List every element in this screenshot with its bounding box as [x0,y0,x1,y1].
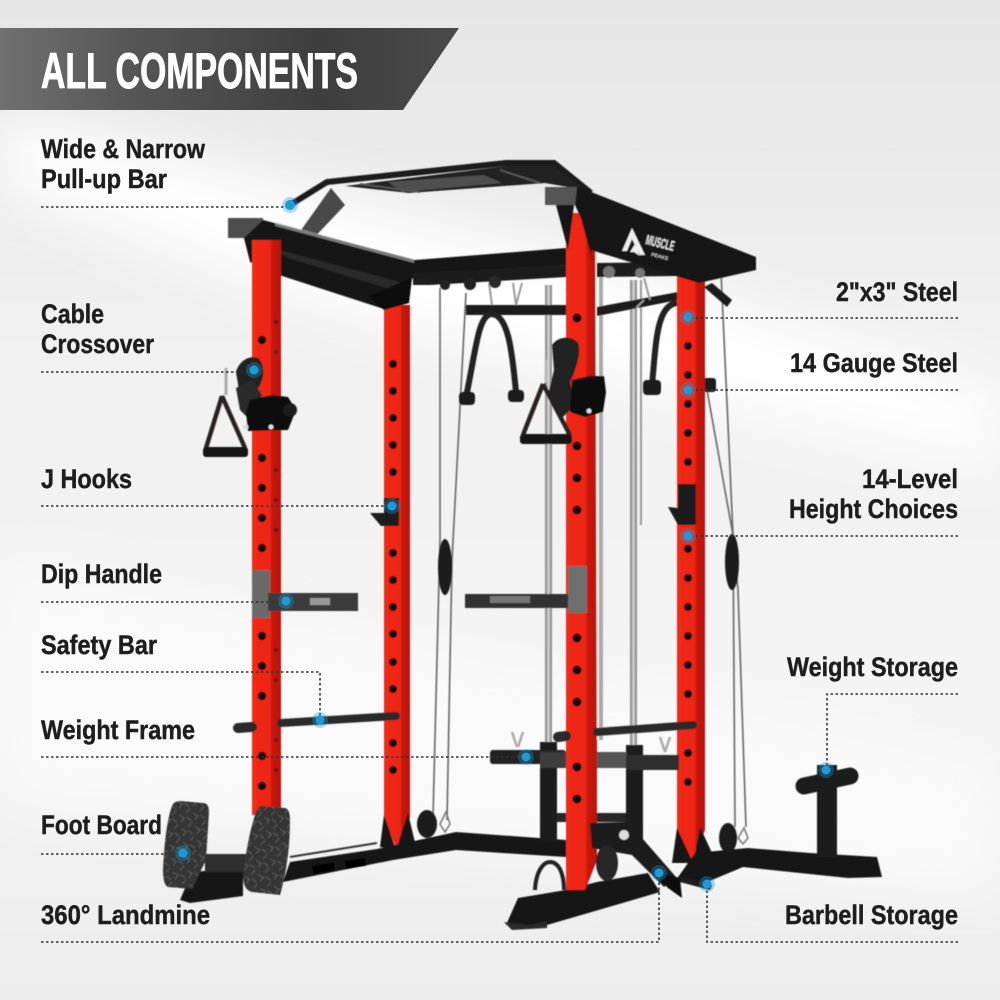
label: 14-level height choices [688,464,958,536]
label: wide and narrow pull-up bar: Pull-up Bar [41,164,167,194]
J hooks [370,484,696,526]
cable clips [438,534,739,595]
left pulley block and triangle handle [203,357,297,457]
top back beam [399,248,677,290]
left callouts [41,134,659,942]
landmine [590,822,712,898]
top plate with logo [545,187,756,307]
label: weight storage [787,652,958,770]
label: cable crossover [41,299,254,372]
label: cable crossover: Crossover [41,329,154,359]
left top beam [228,218,415,310]
label: weight frame: Weight Frame [41,715,195,745]
label: barbell storage: Barbell Storage [785,900,958,930]
label: dip handle: Dip Handle [41,559,162,589]
rear post gussets [380,813,712,865]
label: cable crossover: Cable [41,299,104,329]
label: wide and narrow pull-up bar: Wide & Narrow [41,134,206,164]
label: J hooks: J Hooks [41,464,132,494]
label: 360 degree landmine: 360° Landmine [41,900,210,930]
lower pulleys [417,810,748,853]
title: ALL COMPONENTS [41,43,358,99]
label: 14 gauge steel: 14 Gauge Steel [790,348,958,378]
logo: PEAKS [651,252,669,262]
blue marker dots [175,197,834,892]
weight frame [490,732,679,842]
label: wide and narrow pull-up bar [41,134,290,207]
right callouts [688,277,958,942]
left rear post [384,305,410,848]
left front post [252,240,281,815]
power rack illustration [163,163,882,930]
label: weight storage: Weight Storage [787,652,958,682]
label: 2x3 steel: 2"x3" Steel [836,277,958,307]
label: safety bar: Safety Bar [41,630,157,660]
logo [622,228,676,262]
base rails [283,832,882,930]
logo: MUSCLE [644,231,676,254]
center post front section [566,740,597,890]
label: 14-level height choices: 14-Level [862,464,958,494]
center front post [566,213,597,890]
pull-up bar [290,163,591,243]
label: barbell storage [707,884,958,942]
center pulley block and triangle handle [520,338,606,444]
weight storage post [804,765,850,857]
back guide rods and cables [257,215,746,827]
safety bars [238,716,693,737]
title banner [0,28,459,110]
label: 14-level height choices: Height Choices [789,494,958,524]
label: 360 degree landmine [41,872,659,942]
foot board [163,801,290,903]
right rear post [677,270,705,863]
rear crossbar and V handles [459,278,716,405]
label: foot board: Foot Board [41,810,162,840]
dip handles [252,566,587,618]
label: safety bar [41,630,320,720]
